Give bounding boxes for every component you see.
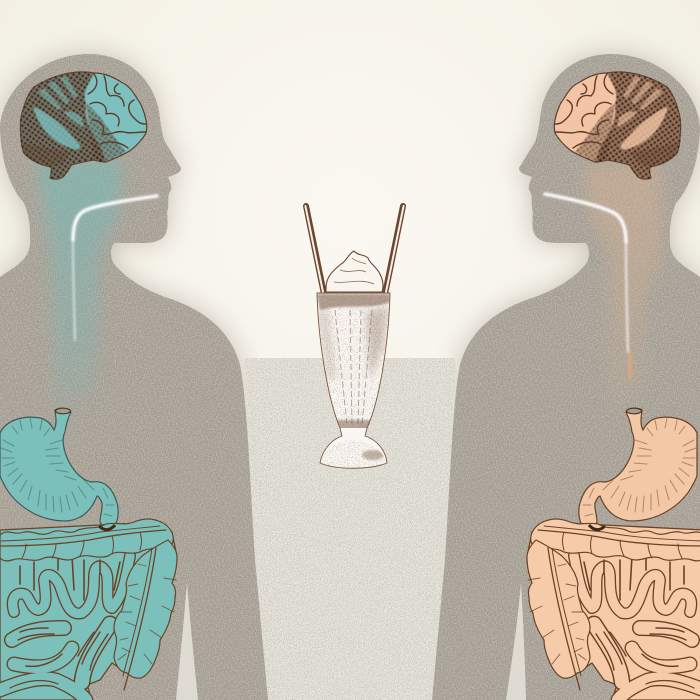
figure: left silhouette (0, 54, 268, 700)
organ: left stomach (0, 408, 118, 528)
streak: right oesophagus (545, 194, 630, 378)
cream folds (334, 258, 374, 284)
panel: centre light column (240, 358, 460, 700)
organ: right brain (554, 72, 681, 179)
arm gap left (176, 582, 198, 700)
illustration: milkshake (305, 206, 404, 471)
figure: right silhouette (432, 54, 700, 700)
streak: left oesophagus (73, 196, 157, 340)
glass stipple (316, 293, 391, 471)
glass body and base (317, 293, 390, 468)
organ: left brain (20, 72, 147, 179)
arm gap right (506, 582, 526, 700)
glow: left throat teal (36, 160, 122, 415)
organ: left intestines (0, 519, 177, 700)
organ: right stomach (579, 408, 697, 528)
glow: right throat orange (585, 165, 662, 410)
straws (305, 206, 404, 294)
whipped cream (326, 251, 383, 292)
organ: right intestines (527, 519, 700, 700)
